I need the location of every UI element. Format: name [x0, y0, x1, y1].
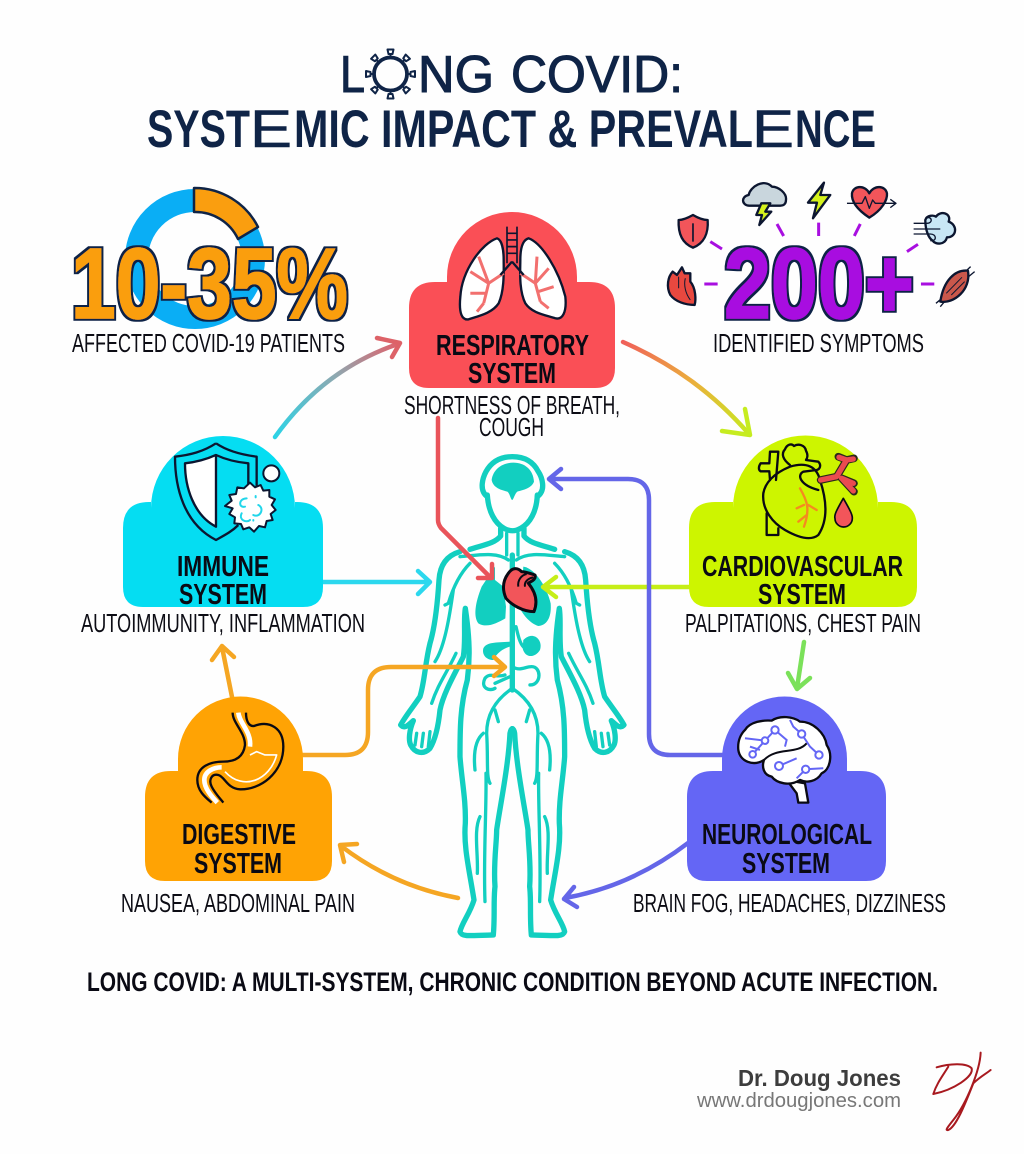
- heading: [702, 819, 872, 880]
- icon: muscle: [936, 267, 975, 307]
- panel: neurological system: [633, 697, 946, 918]
- big number: 10-35%: [71, 228, 348, 340]
- heading: SYSTEM: [194, 848, 282, 880]
- arrow: digestive to body: [303, 657, 505, 755]
- symptoms: COUGH: [479, 414, 544, 442]
- arrow: immune to respiratory: [275, 338, 400, 437]
- heart: [503, 569, 536, 612]
- symptoms: AUTOIMMUNITY, INFLAMMATION: [81, 610, 365, 638]
- right half of body: [512, 528, 624, 936]
- lungs: [475, 567, 551, 626]
- heading: SYSTEM: [758, 579, 846, 611]
- arrow: immune to body: [323, 571, 430, 594]
- arrow: cardiovascular to neurological: [788, 642, 810, 689]
- symptoms: NAUSEA, ABDOMINAL PAIN: [121, 890, 355, 918]
- icon: heart with pulse: [847, 187, 896, 218]
- arrow: neurological to foot: [564, 843, 688, 907]
- title: NCE: [795, 100, 876, 159]
- icon: lightning bolt: [808, 183, 830, 218]
- donut chart: [136, 188, 258, 318]
- heading: DIGESTIVE: [182, 819, 296, 851]
- symptoms: [404, 392, 620, 442]
- arrow: respiratory to heart: [438, 418, 492, 578]
- caption: AFFECTED COVID-19 PATIENTS: [72, 330, 345, 358]
- panel shape: [145, 697, 332, 881]
- icon: virus letter O: [366, 50, 415, 98]
- symptom icons: [668, 183, 975, 307]
- panel shape: [687, 697, 886, 881]
- title: L: [340, 46, 365, 104]
- symptoms: SHORTNESS OF BREATH,: [404, 392, 620, 420]
- panel: respiratory system: [404, 212, 620, 442]
- heading: [177, 551, 269, 611]
- title: SYST: [147, 100, 250, 159]
- heading: SYSTEM: [742, 848, 830, 880]
- title: COVID:: [511, 46, 683, 104]
- author credit: www.drdougjones.com: [696, 1089, 901, 1112]
- heading: NEUROLOGICAL: [702, 819, 872, 851]
- heading: IMMUNE: [177, 551, 269, 583]
- author credit: Dr. Doug Jones: [738, 1065, 901, 1091]
- central vessel and abdominal organs: [483, 555, 541, 690]
- icon: shield and virus: [175, 443, 279, 540]
- heading: SYSTEM: [179, 579, 267, 611]
- caption: IDENTIFIED SYMPTOMS: [713, 330, 924, 358]
- icon: stomach: [197, 713, 283, 803]
- stat: 200+ symptoms: [668, 183, 975, 358]
- heading: SYSTEM: [468, 358, 556, 390]
- arrow: digestive to immune: [212, 646, 234, 697]
- arrow: cardiovascular to body: [543, 577, 689, 597]
- symptoms: PALPITATIONS, CHEST PAIN: [685, 610, 921, 638]
- left half of body: [401, 528, 512, 936]
- heading: CARDIOVASCULAR: [702, 551, 903, 583]
- icon: lungs: [460, 227, 566, 319]
- brain: [492, 463, 534, 500]
- panel: digestive system: [121, 697, 355, 918]
- body figure: [401, 457, 624, 936]
- heading: [436, 330, 589, 390]
- title: E: [752, 100, 794, 159]
- heading: [182, 819, 296, 880]
- author credit: [696, 1065, 901, 1112]
- arrow: respiratory to cardiovascular: [623, 342, 750, 435]
- icon: shield: [679, 215, 708, 248]
- icon: heart: [759, 444, 854, 538]
- signature: [933, 1053, 991, 1130]
- arrow: neurological to body: [549, 469, 722, 755]
- stat: 10-35% affected: [71, 188, 348, 358]
- title: MIC IMPACT & PREVAL: [294, 100, 753, 159]
- icon: storm cloud: [743, 183, 786, 225]
- title: [147, 46, 876, 159]
- panel: immune system: [81, 436, 365, 638]
- title: E: [250, 100, 292, 159]
- panel shape: [689, 436, 917, 607]
- panel: cardiovascular system: [685, 436, 921, 638]
- icon: anatomical heart: [668, 267, 695, 305]
- panel shape: [409, 212, 615, 388]
- panel shape: [123, 436, 323, 607]
- title: NG: [418, 46, 494, 104]
- heading: [702, 551, 903, 611]
- arrow: foot to digestive: [340, 844, 458, 898]
- icon: wind cloud: [914, 213, 955, 244]
- head: [482, 457, 543, 531]
- icon: brain: [738, 717, 830, 803]
- big number: 200+: [724, 228, 914, 340]
- heading: RESPIRATORY: [436, 330, 589, 362]
